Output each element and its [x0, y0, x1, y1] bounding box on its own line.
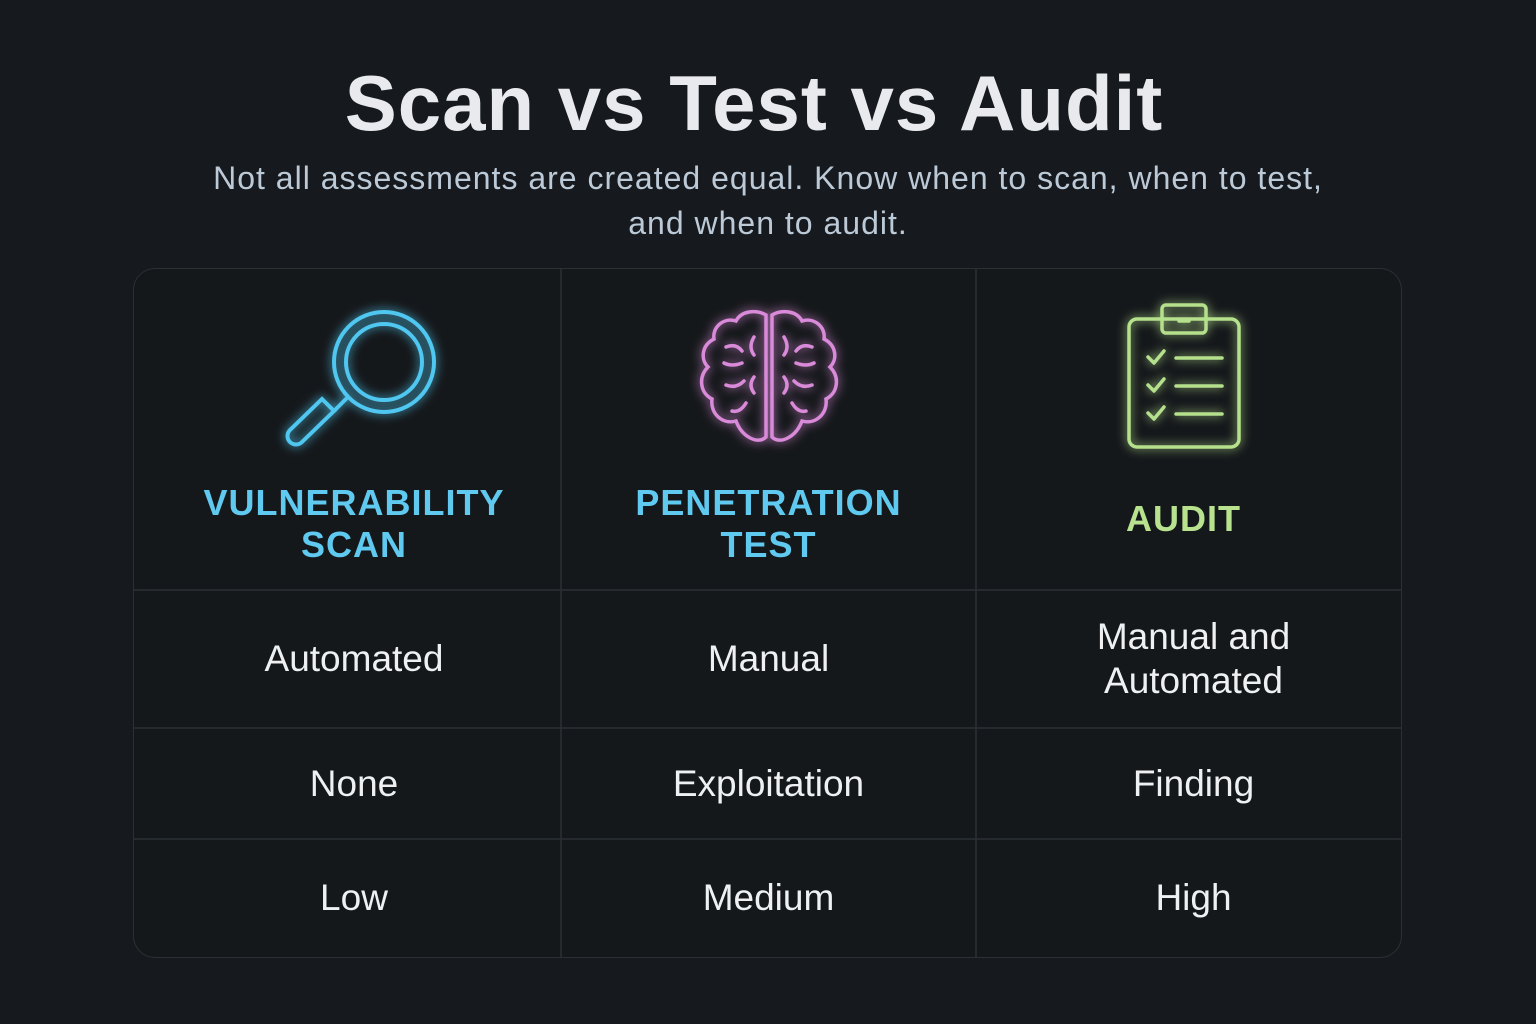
comparison table: Automated [1104, 660, 1283, 701]
title: Scan vs Test vs Audit [345, 59, 1163, 147]
row 2: None [310, 762, 398, 804]
subtitle: Not all assessments are created equal. Know when to scan, when to test, and when to audit. [213, 160, 1323, 241]
heading: vulnerability scan: SCAN [301, 524, 407, 565]
icon: brain [692, 302, 846, 450]
icon: clipboard [1119, 295, 1249, 457]
row 3: Low [320, 877, 388, 918]
row 1: Automated [265, 638, 443, 679]
heading: vulnerability scan: VULNERABILITY [204, 482, 504, 523]
comparison table: Medium [703, 877, 834, 918]
comparison table: Manual [708, 638, 829, 679]
heading: penetration test: TEST [720, 524, 816, 565]
comparison table: Finding [1133, 762, 1254, 804]
comparison table: Manual and [1097, 616, 1290, 657]
comparison table [133, 268, 1402, 958]
heading: penetration test: PENETRATION [635, 482, 902, 523]
heading: vulnerability scan [204, 482, 504, 565]
comparison table: High [1155, 877, 1232, 918]
icon: magnifying glass [278, 302, 444, 454]
comparison table: Exploitation [673, 762, 864, 804]
heading: audit: AUDIT [1126, 498, 1241, 539]
heading: penetration test [635, 482, 902, 565]
